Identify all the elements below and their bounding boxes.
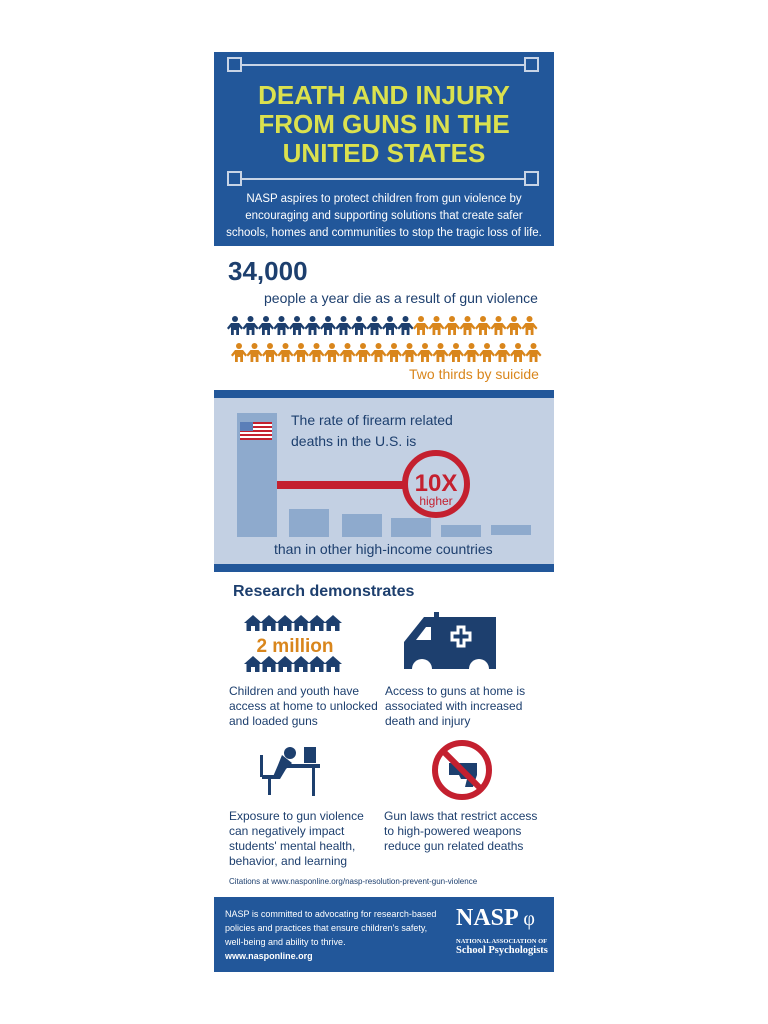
text: association: associated with increased	[385, 699, 522, 713]
bar chart: higher	[419, 494, 453, 508]
text: gun laws	[384, 809, 537, 853]
bar chart: 10X	[415, 470, 457, 497]
text: association	[385, 684, 525, 728]
rate text: deaths in the U.S. is	[291, 433, 416, 449]
people icons	[227, 316, 542, 362]
citations: Citations at www.nasponline.org/nasp-resolution-prevent-gun-violence	[229, 877, 477, 886]
icon: houses 2 million	[244, 615, 342, 672]
text: gun laws: reduce gun related deaths	[384, 839, 523, 853]
footer text: well-being and ability to thrive.	[225, 937, 346, 947]
title	[258, 80, 510, 168]
decorative frame	[227, 57, 539, 186]
logo: NASP	[456, 905, 548, 956]
intro text: encouraging and supporting solutions that create safer	[245, 210, 523, 222]
footer text: policies and practices that ensure children's safety,	[225, 923, 427, 933]
icon: stressed student	[260, 747, 320, 796]
panel: rate comparison	[214, 390, 554, 572]
text: exposure: students' mental health,	[229, 839, 355, 853]
footer text: NASP is committed to advocating for research-based	[225, 909, 436, 919]
logo: NASP: NATIONAL ASSOCIATION OF	[456, 938, 547, 945]
icon: houses 2 million: 2 million	[256, 636, 334, 657]
footer panel	[214, 897, 554, 972]
stat caption: people a year die as a result of gun violence	[264, 290, 538, 306]
text: exposure: Exposure to gun violence	[229, 809, 364, 823]
intro text	[226, 193, 542, 239]
text: gun laws: Gun laws that restrict access	[384, 809, 537, 823]
logo: NASP: NASP φ	[456, 905, 535, 931]
bar chart	[237, 413, 531, 537]
text: access: and loaded guns	[229, 714, 318, 728]
title: UNITED STATES	[283, 138, 485, 168]
suicide note: Two thirds by suicide	[409, 366, 539, 382]
text: access: access at home to unlocked	[229, 699, 378, 713]
text: association: death and injury	[385, 714, 470, 728]
title: FROM GUNS IN THE	[258, 109, 510, 139]
stat: 34,000: 34,000	[228, 256, 308, 286]
text: gun laws: to high-powered weapons	[384, 824, 521, 838]
icon: ambulance	[404, 612, 496, 669]
text: exposure: can negatively impact	[229, 824, 344, 838]
text: exposure: behavior, and learning	[229, 854, 347, 868]
header panel	[214, 52, 554, 246]
comparison caption: than in other high-income countries	[274, 541, 493, 557]
text: access: Children and youth have	[229, 684, 359, 698]
intro text: schools, homes and communities to stop the tragic loss of life.	[226, 227, 542, 239]
logo: NASP: School Psychologists	[456, 945, 548, 956]
text: exposure	[229, 809, 364, 868]
title: DEATH AND INJURY	[258, 80, 510, 110]
rate text	[291, 412, 453, 449]
text: association: Access to guns at home is	[385, 684, 525, 698]
text: access	[229, 684, 378, 728]
intro text: NASP aspires to protect children from gun violence by	[246, 193, 522, 205]
heading: research: Research demonstrates	[233, 583, 414, 600]
footer text	[225, 909, 436, 961]
footer text: www.nasponline.org	[225, 951, 313, 961]
icon: US flag	[240, 422, 272, 440]
icon: no guns	[432, 740, 492, 800]
rate text: The rate of firearm related	[291, 412, 453, 428]
